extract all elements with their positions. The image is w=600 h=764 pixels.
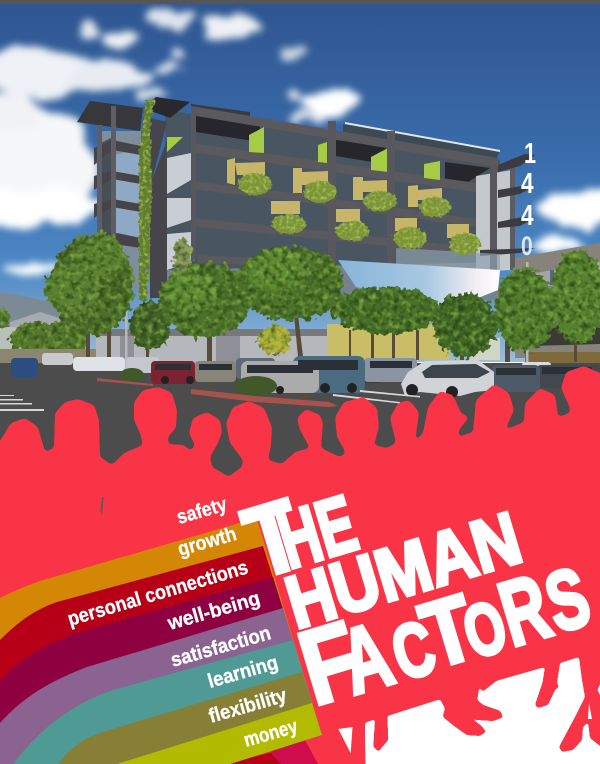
- stripe: growth: [0, 518, 322, 764]
- parking lines: [0, 390, 420, 411]
- upper gradient above glass band: [396, 248, 500, 273]
- stripe: satisfaction: [0, 608, 322, 764]
- title: The Human Factors: [232, 477, 600, 728]
- stripe: flexibility: [58, 672, 322, 764]
- white leg gaps: [338, 684, 600, 753]
- trunks: [86, 315, 577, 398]
- bright side glass: [167, 153, 191, 270]
- address numerals 1440: [521, 138, 536, 262]
- green panels: [167, 127, 440, 180]
- floor slabs: [191, 106, 498, 268]
- wing columns: [97, 106, 116, 246]
- title: The Human Factors: HUMAN: [277, 496, 530, 644]
- roof left: [143, 97, 190, 118]
- shrubs: [120, 368, 277, 396]
- title: The Human Factors: R: [488, 554, 561, 666]
- red crowd silhouette: [0, 366, 600, 764]
- stripe: learning: [13, 640, 322, 764]
- right background building: [515, 243, 600, 363]
- stripe labels: well-being: [164, 587, 263, 635]
- stripe labels: satisfaction: [168, 622, 273, 672]
- clouds: [0, 12, 600, 277]
- address numerals 1440: 1: [524, 138, 536, 170]
- stripe labels: money: [241, 715, 301, 752]
- green wall: [139, 100, 155, 300]
- title: The Human Factors: O: [454, 585, 516, 675]
- stripe labels: growth: [175, 523, 239, 561]
- title: The Human Factors: T: [410, 575, 487, 689]
- mountains: [0, 292, 74, 330]
- title: The Human Factors: A: [329, 602, 403, 714]
- title: The Human Factors: C: [383, 605, 445, 697]
- title: The Human Factors: F: [286, 598, 373, 728]
- left wing canopy: [77, 101, 143, 131]
- stripe labels: [65, 493, 301, 752]
- title: The Human Factors: T: [232, 477, 314, 600]
- photo: building and parking lot: [0, 0, 600, 520]
- stripe labels: personal connections: [65, 557, 251, 631]
- background tree line: [0, 309, 88, 355]
- building: [77, 97, 535, 310]
- under-tree ground strip: [0, 349, 100, 363]
- balcony undersides: [196, 116, 490, 184]
- gold panels: [227, 158, 469, 238]
- address numerals 1440: 4: [521, 198, 534, 232]
- right concrete panel: [476, 170, 512, 272]
- left low building: [0, 327, 16, 349]
- main glass body: [165, 110, 500, 275]
- trees: [44, 233, 600, 398]
- stripe: well-being: [0, 577, 322, 764]
- building under-storey: [96, 324, 500, 371]
- stripe labels: flexibility: [206, 684, 290, 728]
- lower stripes: [225, 752, 281, 764]
- car windows: [155, 360, 592, 375]
- stripe labels: learning: [205, 652, 281, 693]
- main pier: [150, 118, 167, 298]
- sky: [0, 0, 600, 362]
- crowns: [44, 233, 600, 357]
- columns: [191, 108, 499, 273]
- curbs: [97, 378, 338, 407]
- stripe: money: [117, 703, 322, 764]
- hanging plant boxes: [238, 173, 481, 255]
- top bar: [0, 0, 600, 4]
- left wing slabs: [94, 140, 141, 248]
- parked cars: [11, 353, 600, 398]
- white area below banner with legs: [365, 657, 600, 764]
- address numerals 1440: 0: [521, 232, 533, 262]
- bottom glass band: [338, 260, 500, 310]
- lamp posts: [125, 262, 528, 370]
- left wing glass: [97, 131, 141, 290]
- silhouette sliver: [100, 497, 104, 516]
- title: The Human Factors: S: [535, 550, 600, 651]
- stripe labels: safety: [174, 493, 230, 529]
- coloured stripes panel: [0, 493, 322, 764]
- address numerals 1440: 4: [521, 166, 534, 200]
- title: The Human Factors: HE: [269, 479, 366, 586]
- right balcony slabs: [480, 154, 535, 256]
- roof shade: [191, 104, 250, 118]
- asphalt: [0, 363, 600, 520]
- stripe: personal connections: [0, 546, 322, 764]
